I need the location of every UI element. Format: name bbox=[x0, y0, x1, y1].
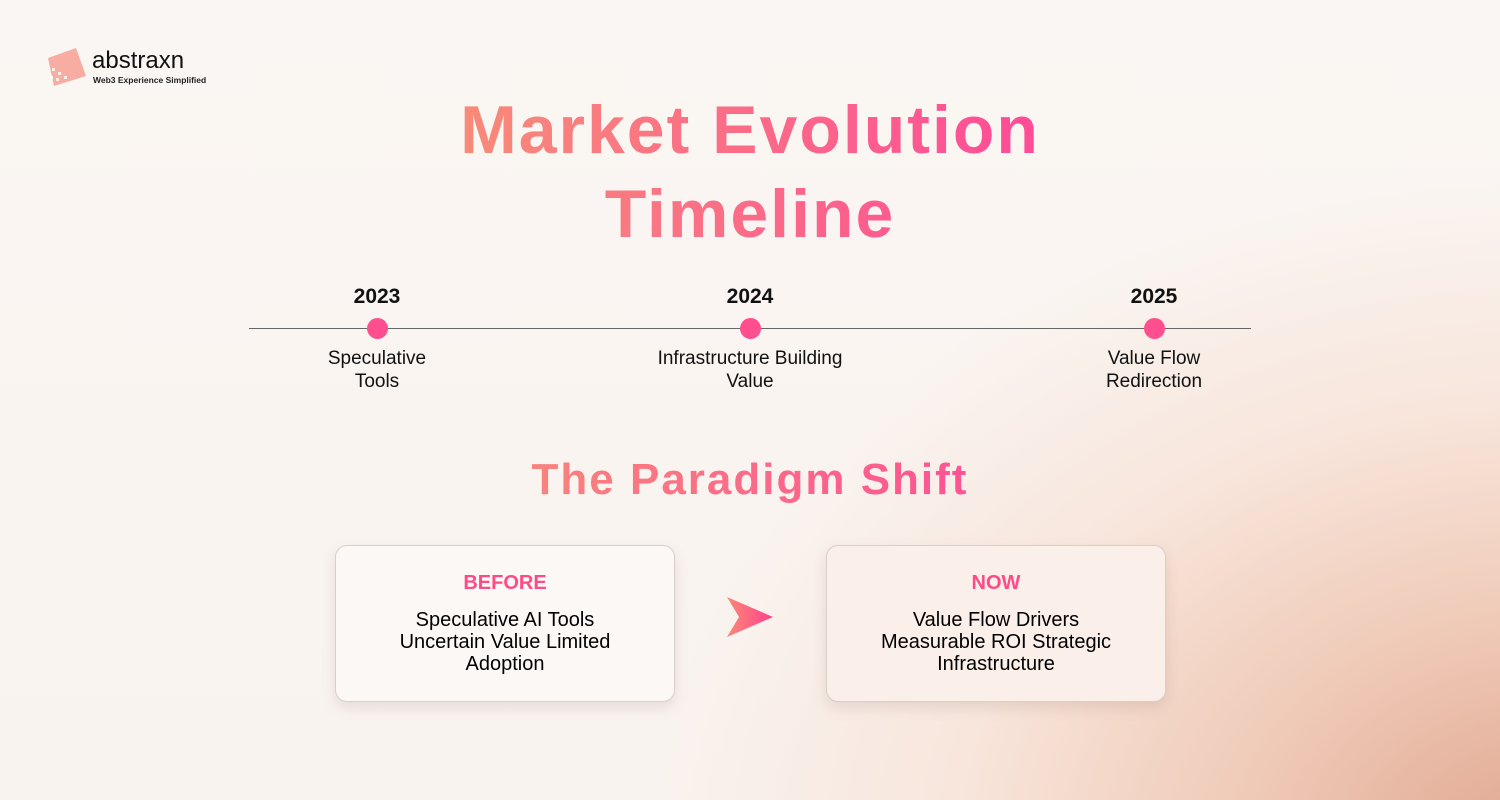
card: before: Uncertain Value Limited bbox=[400, 631, 610, 653]
arrow bbox=[727, 597, 773, 637]
card: now: Infrastructure bbox=[937, 653, 1055, 675]
milestone 2025: Redirection bbox=[1106, 371, 1202, 392]
title: Timeline bbox=[605, 176, 895, 252]
milestone 2024: Infrastructure Building bbox=[658, 348, 842, 369]
heading: paradigm shift: The Paradigm Shift bbox=[532, 455, 968, 504]
card: now bbox=[826, 545, 1166, 702]
card: before: Speculative AI Tools bbox=[416, 609, 594, 631]
milestone 2025: Value Flow bbox=[1108, 348, 1200, 369]
card: before bbox=[335, 545, 675, 702]
text: logo name: abstraxn bbox=[92, 47, 184, 74]
milestone 2023: Speculative bbox=[328, 348, 426, 369]
card: now: Measurable ROI Strategic bbox=[881, 631, 1111, 653]
heading: paradigm shift bbox=[0, 452, 1500, 508]
milestone 2023 bbox=[328, 285, 426, 392]
milestone 2025: 2025 bbox=[1131, 285, 1177, 308]
milestone 2025 bbox=[1106, 285, 1202, 392]
card: now: Value Flow Drivers bbox=[913, 609, 1079, 631]
milestone 2023: 2023 bbox=[354, 285, 400, 308]
icon: logo mark bbox=[48, 48, 86, 86]
text: logo tagline: Web3 Experience Simplified bbox=[93, 75, 206, 85]
milestone 2024: 2024 bbox=[727, 285, 773, 308]
card: now: NOW bbox=[972, 572, 1020, 594]
title: Market Evolution bbox=[460, 92, 1040, 168]
card: before: BEFORE bbox=[463, 572, 547, 594]
milestone 2024: Value bbox=[726, 371, 774, 392]
milestone 2024 bbox=[658, 285, 842, 392]
card: before: Adoption bbox=[466, 653, 544, 675]
timeline bbox=[249, 285, 1251, 392]
milestone 2023: Tools bbox=[355, 371, 399, 392]
title bbox=[0, 88, 1500, 256]
logo bbox=[48, 47, 206, 86]
